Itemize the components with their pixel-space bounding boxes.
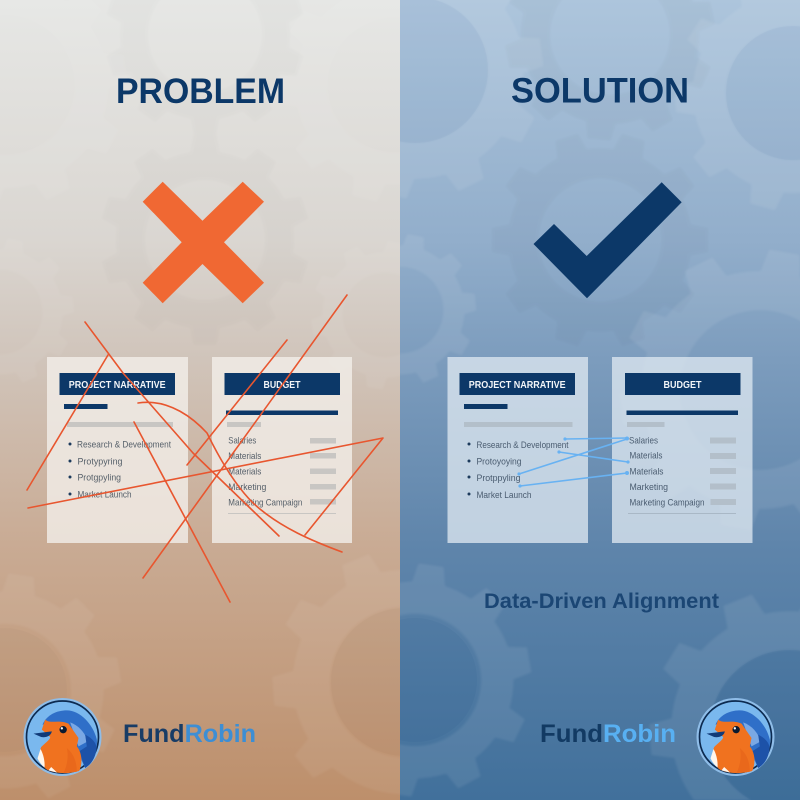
narrative header: PROJECT NARRATIVE [469,380,566,391]
narrative bullet list: Market Launch [78,488,132,500]
budget rows: Marketing [630,481,668,492]
narrative bullet list: Market Launch [476,489,532,500]
budget header: BUDGET [664,380,702,391]
narrative bullet list: Protgpyling [78,472,121,482]
document: budget (solution) [612,357,752,543]
budget rows: Materials [228,466,262,476]
narrative header [460,373,575,395]
budget header: BUDGET [264,380,301,391]
logo: FundRobin (problem) [24,698,256,776]
narrative bullet list: Protypyring [78,456,122,466]
budget header [625,373,740,395]
budget rows: Salaries [629,434,658,446]
narrative header [60,373,175,395]
document: project narrative (solution) [448,357,588,543]
narrative header: PROJECT NARRATIVE [69,380,166,391]
caption: Data-Driven Alignment: Data-Driven Alignment [484,590,719,613]
icon: navy check mark [534,182,682,298]
narrative bullet list [68,438,171,500]
icon: robin badge [697,698,774,776]
budget rows: Materials [630,450,663,460]
blue alignment connectors [517,436,630,488]
narrative bullet list: Protppyling [476,472,520,483]
narrative bullet list: Research & Development [476,439,569,450]
budget rows [228,434,336,508]
budget rows [629,434,736,508]
budget rows: Marketing Campaign [630,496,704,508]
problem background [0,0,400,800]
narrative bullet list: Research & Development [77,438,171,450]
logo: FundRobin (solution) [540,698,774,776]
title: PROBLEM: PROBLEM [116,71,285,111]
document: budget (problem) [212,357,352,543]
budget rows: Salaries [228,434,257,446]
budget rows: Marketing [228,481,266,492]
panel: problem [0,0,400,800]
icon: orange X [143,182,264,303]
document: project narrative (problem) [47,357,188,543]
panel: solution [400,0,800,800]
budget rows: Materials [630,466,664,476]
budget header [224,373,340,395]
budget rows: Marketing Campaign [228,496,302,508]
budget rows: Materials [228,450,262,461]
solution background [400,0,800,800]
narrative bullet list: Protoyoying [476,456,522,466]
narrative bullet list [468,439,569,500]
tangled red lines [27,295,383,602]
title: SOLUTION: SOLUTION [511,70,689,110]
icon: robin badge [24,698,101,776]
brand name: FundRobin [123,720,256,748]
brand name: FundRobin [540,720,676,748]
